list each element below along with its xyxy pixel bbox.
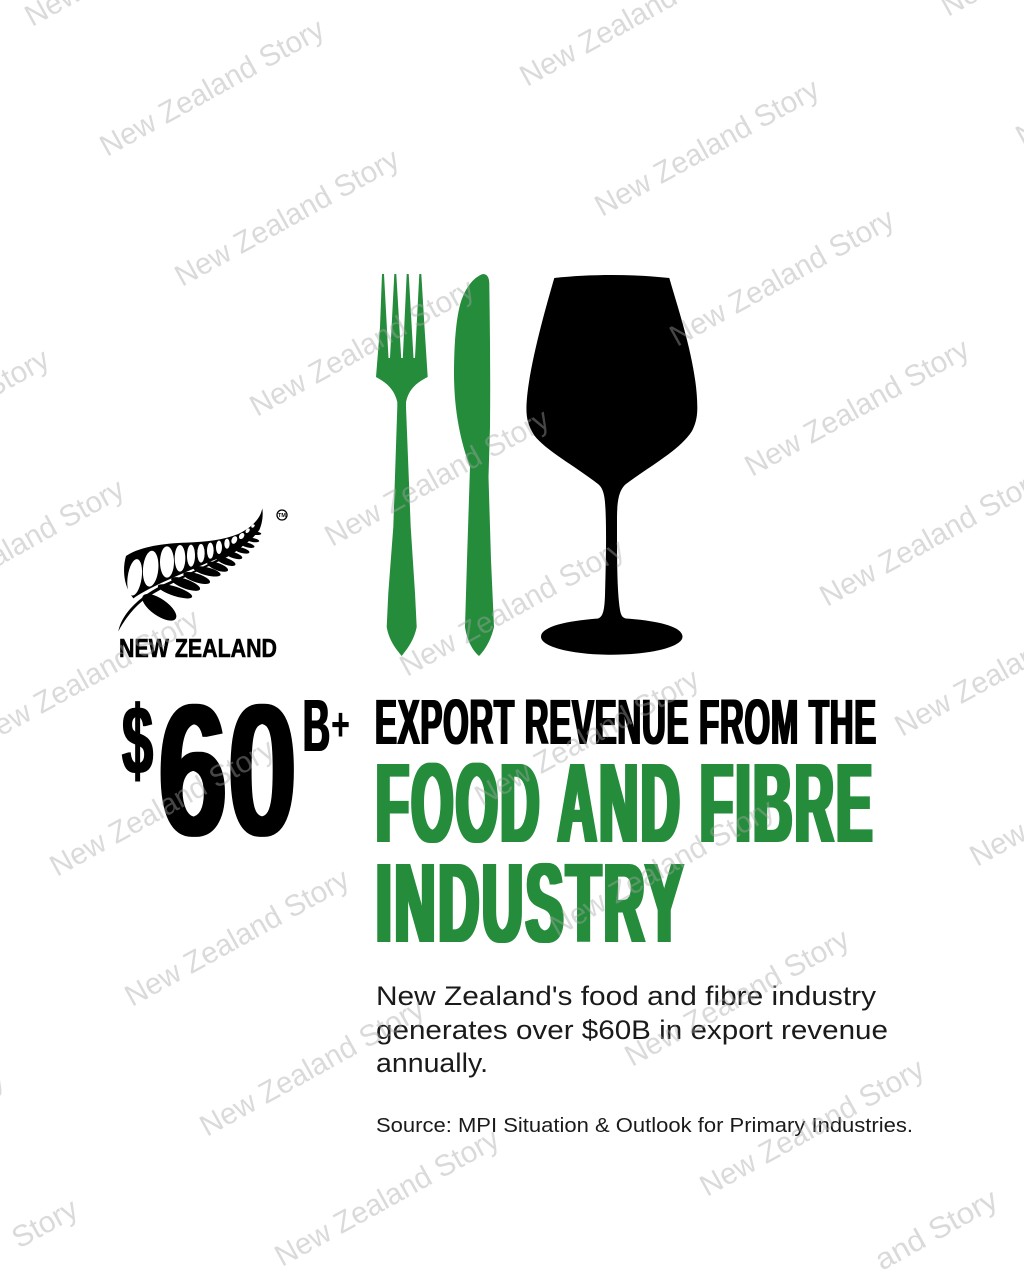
icon: fork [376,274,428,656]
watermark: New Zealand Story [394,533,630,683]
big number: $60B+: $ [122,685,153,795]
heading: food and fibre industry [376,740,875,966]
heading: food and fibre industry: INDUSTRY [376,840,686,966]
watermark: New Zealand Story [469,663,705,813]
watermark: New Zealand Story [589,73,825,223]
watermark: New Zealand Story [619,923,855,1073]
watermark: New Zealand Story [319,403,555,553]
logo wordmark: NEW ZEALAND [119,633,277,663]
body text: generates over $60B in export revenue [376,1015,888,1045]
logo: New Zealand fern [118,509,287,663]
trademark mark [277,510,287,520]
fern upper frond [124,509,263,598]
fern white oval gaps [125,524,255,596]
watermark: New Zealand Story [94,13,330,163]
watermark: and Story [869,1183,1003,1277]
watermark: New Zealand Story [44,733,280,883]
watermark: New Zealand Story [169,143,405,293]
watermark: New Zealand Story [694,1053,930,1203]
body text: annually. [376,1048,488,1078]
icon: knife [454,274,494,656]
body text [376,981,888,1078]
watermark: Story [6,1192,84,1255]
watermark: New Zealand Story [544,793,780,943]
source note: Source: MPI Situation & Outlook for Primary Industries. [376,1115,913,1137]
body text: New Zealand's food and fibre industry [376,981,877,1011]
fern stem [118,509,262,631]
big number: $60B+: B [303,684,330,767]
big number: $60B+: + [331,698,350,750]
watermark: New Zealand Story [269,1123,505,1273]
watermark: New Zealand Story [244,273,480,423]
trademark mark: TM [278,513,286,519]
watermark: New Zealand Story [119,863,355,1013]
watermark: New Zealand Story [194,993,430,1143]
watermark: New Zealand Story [739,333,975,483]
big number: $60B+: 60 [158,665,297,875]
fern lower leaves [138,531,261,626]
watermark: New Zealand Story [664,203,900,353]
icon: wine glass [526,275,697,655]
